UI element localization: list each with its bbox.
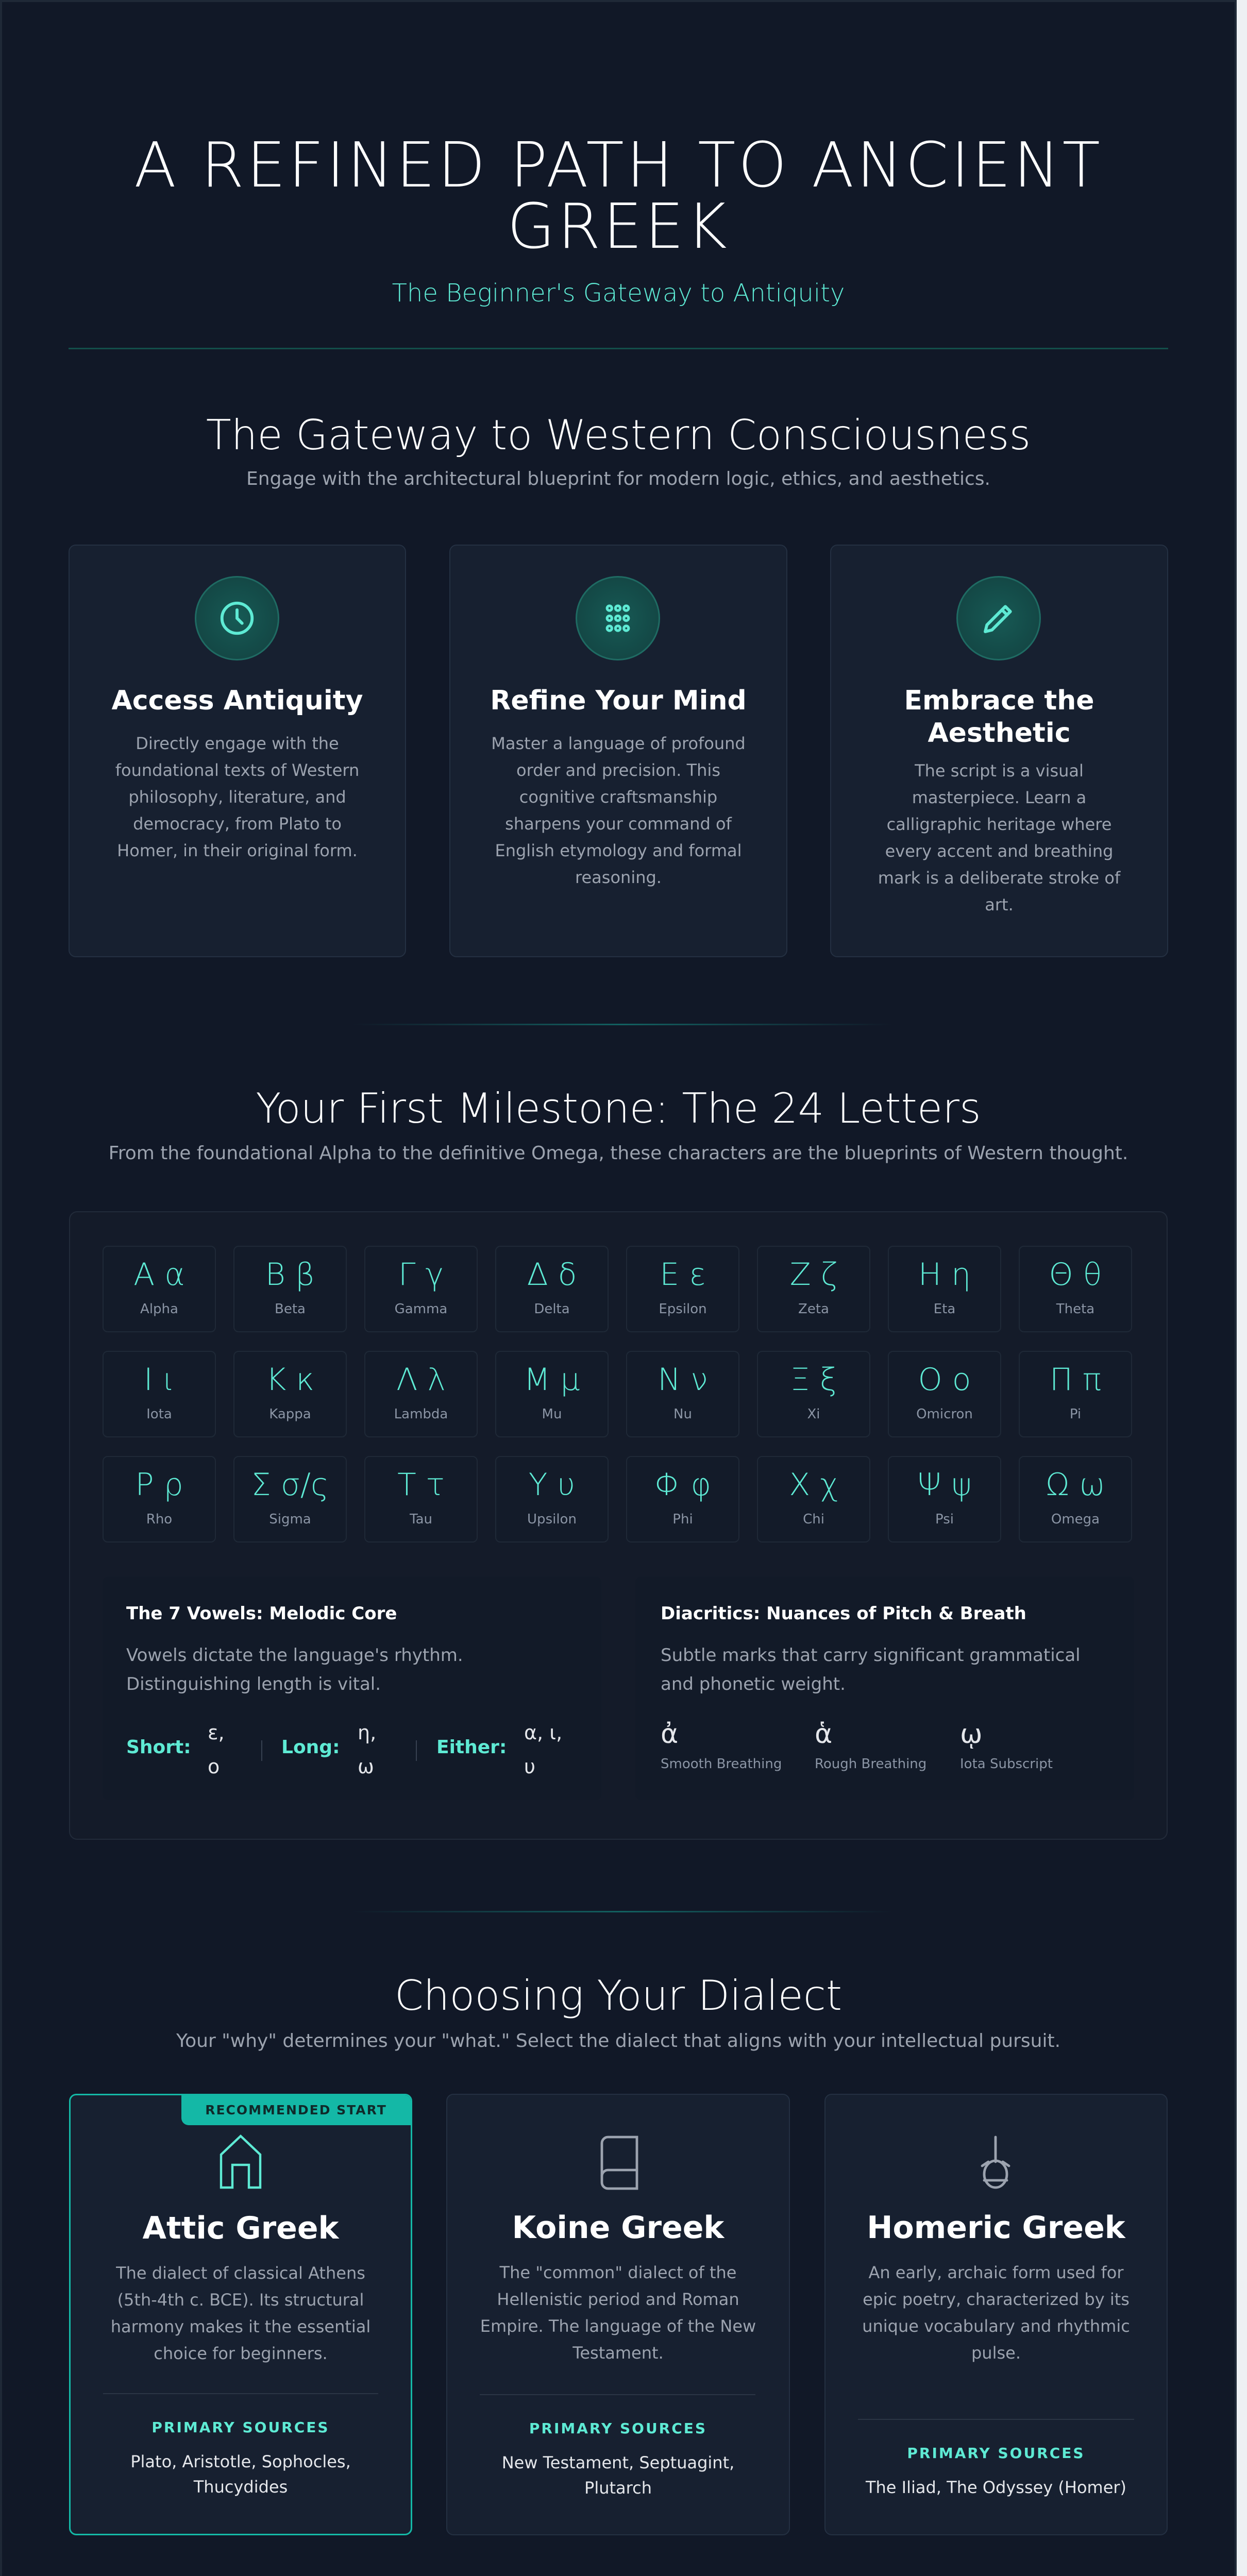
card text bbox=[862, 2263, 1130, 2363]
diacritic examples: Smooth Breathing bbox=[661, 1756, 782, 1772]
letter grid: Gamma bbox=[395, 1301, 447, 1317]
diacritic examples: ῳ bbox=[960, 1719, 983, 1750]
diacritic examples: ἀ bbox=[661, 1719, 678, 1750]
letter grid: Rho bbox=[146, 1512, 172, 1527]
card text: Directly engage with the bbox=[136, 734, 339, 753]
letter grid: Delta bbox=[534, 1301, 570, 1317]
letter grid: Sigma bbox=[269, 1512, 311, 1527]
letter grid: Phi bbox=[672, 1512, 693, 1527]
icon: dots grid bbox=[576, 576, 660, 660]
letter grid: Ν ν bbox=[658, 1362, 708, 1398]
diacritic examples: ἁ bbox=[815, 1719, 832, 1750]
card text: reasoning. bbox=[575, 868, 662, 887]
card title: Embrace the bbox=[904, 685, 1094, 716]
primary sources: The Iliad, The Odyssey (Homer) bbox=[866, 2478, 1126, 2497]
letter grid: Nu bbox=[673, 1406, 692, 1422]
title bbox=[134, 130, 1103, 263]
primary sources: Plato, Aristotle, Sophocles, bbox=[130, 2452, 351, 2471]
card text: sharpens your command of bbox=[505, 814, 732, 834]
letter grid: Beta bbox=[275, 1301, 306, 1317]
letter grid: Ω ω bbox=[1046, 1467, 1105, 1503]
badge: recommended start: RECOMMENDED START bbox=[205, 2103, 387, 2117]
letter grid: Τ τ bbox=[397, 1467, 445, 1503]
icon: clock bbox=[195, 576, 279, 660]
card text bbox=[480, 2263, 756, 2363]
letter grid: Omega bbox=[1051, 1512, 1100, 1527]
letter grid: Π π bbox=[1050, 1362, 1101, 1398]
vowel classes: Long: bbox=[281, 1737, 340, 1758]
letter grid: Ξ ξ bbox=[790, 1362, 837, 1398]
vowels text: Distinguishing length is vital. bbox=[126, 1674, 381, 1694]
letter grid bbox=[103, 1246, 1132, 1543]
card text: democracy, from Plato to bbox=[133, 814, 342, 834]
card text: order and precision. This bbox=[516, 760, 720, 780]
vowels heading: The 7 Vowels: Melodic Core bbox=[126, 1603, 397, 1624]
primary sources: New Testament, Septuagint, bbox=[502, 2453, 734, 2472]
letter grid: Omicron bbox=[916, 1406, 973, 1422]
vowel classes: Either: bbox=[436, 1737, 507, 1758]
letter grid: Zeta bbox=[798, 1301, 829, 1317]
card text: art. bbox=[985, 895, 1014, 914]
card text: The dialect of classical Athens bbox=[116, 2263, 365, 2283]
card text: mark is a deliberate stroke of bbox=[878, 868, 1120, 888]
card title bbox=[904, 685, 1094, 749]
card text: unique vocabulary and rhythmic bbox=[862, 2316, 1130, 2336]
primary sources: PRIMARY SOURCES bbox=[907, 2445, 1085, 2462]
diacritics text: and phonetic weight. bbox=[661, 1674, 846, 1694]
letter grid: Lambda bbox=[394, 1406, 448, 1422]
letter grid: Psi bbox=[935, 1512, 954, 1527]
letter grid: Epsilon bbox=[659, 1301, 707, 1317]
letter grid: Κ κ bbox=[266, 1362, 314, 1398]
vowel classes: ο bbox=[208, 1755, 220, 1778]
icon: helmet bbox=[981, 2136, 1010, 2189]
vowel classes: α, ι, bbox=[524, 1721, 562, 1744]
badge: recommended start bbox=[181, 2095, 411, 2125]
card text: Empire. The language of the New bbox=[480, 2316, 756, 2336]
diacritics heading: Diacritics: Nuances of Pitch & Breath bbox=[661, 1603, 1026, 1624]
letter grid: Ε ε bbox=[660, 1257, 706, 1293]
letter grid: Eta bbox=[934, 1301, 955, 1317]
card text: Homer, in their original form. bbox=[117, 841, 358, 860]
card text: calligraphic heritage where bbox=[887, 815, 1111, 834]
card text: harmony makes it the essential bbox=[111, 2317, 370, 2336]
letter grid: Ι ι bbox=[144, 1362, 175, 1398]
primary sources: Plutarch bbox=[584, 2478, 652, 2498]
card text: foundational texts of Western bbox=[115, 760, 359, 780]
letter grid: Ο ο bbox=[918, 1362, 971, 1398]
letter grid: Kappa bbox=[269, 1406, 311, 1422]
panel: attic greek bbox=[69, 2094, 412, 2535]
section heading: letters: Your First Milestone: The 24 Letters bbox=[256, 1084, 981, 1132]
card text: choice for beginners. bbox=[154, 2344, 328, 2363]
vowel classes: ε, bbox=[208, 1721, 225, 1744]
section heading: gateway: The Gateway to Western Consciousness bbox=[206, 411, 1031, 459]
letter grid: Χ χ bbox=[789, 1467, 838, 1503]
card text: epic poetry, characterized by its bbox=[863, 2290, 1130, 2309]
card text: English etymology and formal bbox=[495, 841, 742, 860]
letter grid: Δ δ bbox=[527, 1257, 577, 1293]
letter grid: Α α bbox=[133, 1257, 185, 1293]
section heading: dialect: Choosing Your Dialect bbox=[395, 1972, 842, 2020]
panel: embrace the aesthetic bbox=[830, 545, 1168, 957]
card text: (5th-4th c. BCE). Its structural bbox=[117, 2290, 364, 2310]
panel: alphabet bbox=[69, 1211, 1168, 1840]
diacritic examples: Iota Subscript bbox=[960, 1756, 1053, 1772]
card text: Testament. bbox=[572, 2343, 664, 2363]
letter grid: Ζ ζ bbox=[790, 1257, 837, 1293]
panel: homeric greek bbox=[824, 2094, 1168, 2535]
letter grid: Iota bbox=[146, 1406, 172, 1422]
card text: pulse. bbox=[971, 2343, 1021, 2363]
diacritic examples bbox=[661, 1719, 1053, 1772]
card text bbox=[491, 734, 746, 887]
title: A REFINED PATH TO ANCIENT bbox=[134, 130, 1103, 201]
primary sources: PRIMARY SOURCES bbox=[151, 2419, 330, 2436]
card text: masterpiece. Learn a bbox=[912, 788, 1086, 807]
card text: Hellenistic period and Roman bbox=[497, 2290, 739, 2309]
letter grid: Λ λ bbox=[396, 1362, 446, 1398]
card title: Aesthetic bbox=[928, 718, 1071, 749]
card text: every accent and breathing bbox=[885, 841, 1113, 861]
letter grid: Φ φ bbox=[654, 1467, 711, 1503]
letter grid: Xi bbox=[807, 1406, 820, 1422]
card text bbox=[111, 2263, 370, 2363]
section subtext: dialect: Your "why" determines your "what." Select the dialect that aligns with your intellectual pursuit. bbox=[176, 2030, 1060, 2052]
letter grid: Ρ ρ bbox=[135, 1467, 183, 1503]
letter grid: Tau bbox=[410, 1512, 432, 1527]
card text: The script is a visual bbox=[915, 761, 1084, 781]
card text: cognitive craftsmanship bbox=[519, 787, 717, 807]
card text: The "common" dialect of the bbox=[500, 2263, 736, 2282]
diacritics text: Subtle marks that carry significant grammatical bbox=[661, 1645, 1081, 1666]
icon: pencil bbox=[956, 576, 1041, 660]
panel: koine greek bbox=[446, 2094, 790, 2535]
card text: An early, archaic form used for bbox=[868, 2263, 1124, 2282]
vowel classes: υ bbox=[524, 1755, 535, 1778]
card text bbox=[878, 761, 1121, 914]
icon: book bbox=[601, 2136, 638, 2190]
letter grid: Μ μ bbox=[524, 1362, 580, 1398]
section subtext: letters: From the foundational Alpha to the definitive Omega, these characters are the blueprints of Western thought. bbox=[109, 1143, 1128, 1164]
vowel classes bbox=[126, 1721, 562, 1778]
vowel classes: η, bbox=[358, 1721, 376, 1744]
primary sources bbox=[130, 2419, 351, 2497]
letter grid: Η η bbox=[918, 1257, 971, 1293]
card title: Access Antiquity bbox=[112, 685, 363, 716]
vowel classes: Short: bbox=[126, 1737, 191, 1758]
diacritic examples: Rough Breathing bbox=[815, 1756, 926, 1772]
card title: Refine Your Mind bbox=[490, 685, 747, 716]
primary sources bbox=[866, 2445, 1126, 2497]
subtitle: The Beginner's Gateway to Antiquity bbox=[392, 279, 845, 308]
letter grid: Υ υ bbox=[529, 1467, 575, 1503]
card title: Koine Greek bbox=[512, 2210, 724, 2246]
primary sources: Thucydides bbox=[194, 2477, 288, 2497]
letter grid: Theta bbox=[1056, 1301, 1094, 1317]
card text bbox=[115, 734, 359, 860]
vowels block bbox=[103, 1577, 601, 1800]
vowels text bbox=[126, 1645, 463, 1694]
card text: philosophy, literature, and bbox=[128, 787, 346, 807]
letter grid: Alpha bbox=[140, 1301, 178, 1317]
letter grid: Upsilon bbox=[527, 1512, 577, 1527]
title: GREEK bbox=[507, 191, 730, 263]
card title: Attic Greek bbox=[143, 2210, 339, 2246]
icon: temple bbox=[220, 2134, 262, 2189]
letter grid: Σ σ/ς bbox=[251, 1467, 329, 1503]
vowels text: Vowels dictate the language's rhythm. bbox=[126, 1645, 463, 1666]
letter grid: Ψ ψ bbox=[917, 1467, 972, 1503]
letter grid: Γ γ bbox=[398, 1257, 444, 1293]
letter grid: Β β bbox=[265, 1257, 315, 1293]
diacritics text bbox=[661, 1645, 1081, 1694]
letter grid: Pi bbox=[1070, 1406, 1081, 1422]
letter grid: Chi bbox=[803, 1512, 824, 1527]
primary sources bbox=[502, 2420, 734, 2498]
vowel classes: ω bbox=[358, 1755, 374, 1778]
panel: access antiquity bbox=[69, 545, 406, 957]
letter grid: Mu bbox=[542, 1406, 562, 1422]
letter grid: Θ θ bbox=[1049, 1257, 1102, 1293]
primary sources: PRIMARY SOURCES bbox=[529, 2420, 707, 2437]
card text: Master a language of profound bbox=[491, 734, 746, 753]
panel: refine your mind bbox=[449, 545, 787, 957]
diacritics block bbox=[635, 1577, 1134, 1800]
section subtext: gateway: Engage with the architectural blueprint for modern logic, ethics, and aesthetics. bbox=[246, 468, 990, 489]
card title: Homeric Greek bbox=[867, 2210, 1125, 2246]
